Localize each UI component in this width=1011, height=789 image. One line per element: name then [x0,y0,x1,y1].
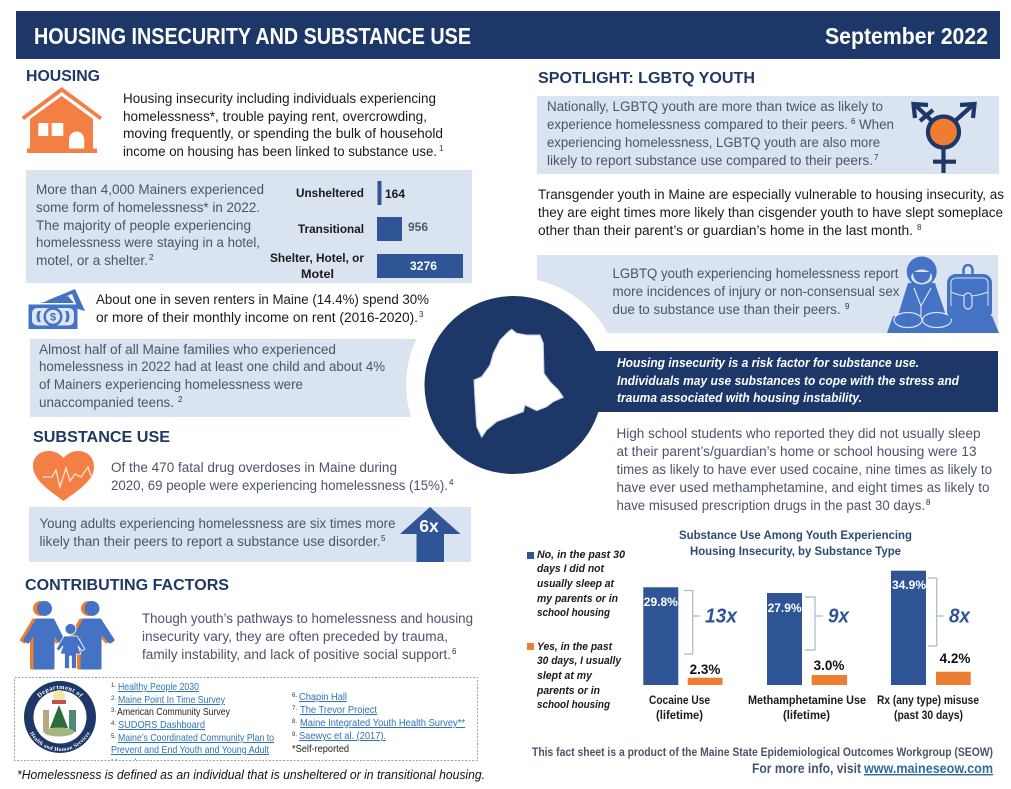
text: pathways: Though youth’s pathways to homelessness and housing [142,611,473,626]
text: six times: 5 [381,534,386,543]
text: high school students: have ever used methamphetamine, and eight times as likely to [616,480,990,495]
reference list: right column: 7. [292,706,297,712]
Rx bars: (past 30 days) [894,710,963,722]
reference list: left column: 2. [111,696,116,702]
text: pathways: 6 [452,647,457,656]
text: overdoses: Of the 470 fatal drug overdoses in Maine during [111,460,397,475]
bar chart: homelessness type: 956 [408,222,428,234]
text: six times: Young adults experiencing homelessness are six times more [40,516,396,531]
heading: contributing factors: CONTRIBUTING FACTORS [25,577,229,594]
text: overdoses: 2020, 69 people were experiencing homelessness (15%). [111,478,448,493]
reference list: right column: 6. [292,693,297,699]
reference list: left column: Homelessness [111,758,169,769]
methamphetamine bars [748,593,866,722]
legend: my parents or in [537,593,618,605]
bar chart: homelessness type: 3276 [410,261,437,273]
text: injury [612,266,900,317]
icon: map of Maine [474,329,563,437]
text: homelessness counts: motel, or a shelter. [36,253,148,268]
bar chart: homelessness type: Motel [301,269,334,281]
header banner [16,11,1000,59]
text: LGBTQ homelessness [547,99,894,168]
legend: school housing [537,699,610,711]
chart title: Housing Insecurity, by Substance Type [690,544,901,558]
text: homelessness counts: homelessness were staying in a hotel, [36,235,260,250]
text: high school students: High school students who reported they did not usually sleep [616,426,980,441]
bar chart: substance use [643,571,979,722]
legend: No, in the past 30 [537,549,626,561]
footer: www.maineseow.com [863,760,993,776]
icon: family [22,601,113,668]
text: injury: 9 [845,302,850,311]
icon: up arrow 6x [400,507,460,562]
legend: parents or in [536,685,600,697]
text: transgender youth: they are eight times more likely than cisgender youth to have slept someplace [538,205,1003,220]
heading: spotlight: SPOTLIGHT: LGBTQ YOUTH [538,70,755,87]
text: homelessness counts [36,182,264,268]
cocaine bars [643,587,738,722]
cocaine bars: 29.8% [644,595,678,609]
reference list: left column: 1. [111,683,116,689]
text: six times [40,516,396,549]
text: families: Almost half of all Maine families who experienced [39,342,336,357]
text: housing intro [123,91,444,159]
panel: injury and non-consensual sex [537,255,998,333]
text: families: 2 [178,395,183,404]
panel: LGBTQ homelessness [537,96,999,174]
date: September 2022 [825,23,988,49]
reference list: right column: *Self-reported [292,744,349,755]
cocaine bars: (lifetime) [656,710,703,722]
text: high school students [616,426,992,513]
legend: slept at my [537,670,593,682]
text: injury: due to substance use than their peers. [612,302,840,317]
icon: department seal: Department of [36,685,84,698]
bar chart: homelessness type: Transitional [298,224,364,236]
text: pathways: family instability, and lack of positive social support. [142,647,451,662]
text: LGBTQ homelessness: likely to report substance use compared to their peers. [547,153,873,168]
text: rent burden: 3 [419,310,424,319]
icon: transgender symbol [914,104,974,173]
reference list: left column: 3. [111,708,116,714]
text: homelessness counts: some form of homelessness* in 2022. [36,200,260,215]
reference list: left column: Maine’s Coordinated Community Plan to [118,733,274,744]
legend: usually sleep at [537,578,615,590]
reference list: left column: 4. [111,721,116,727]
text: housing intro: 1 [439,144,444,153]
callout text: Individuals may use substances to cope with the stress and [617,374,959,388]
legend: 30 days, I usually [537,655,622,667]
text: LGBTQ homelessness: When [859,117,894,132]
text: six times: likely than their peers to report a substance use disorder. [40,534,380,549]
footnote: *Homelessness is defined as an individual that is unsheltered or in transitional housing. [17,768,485,782]
Rx bars: Rx (any type) misuse [877,695,979,707]
text: injury: LGBTQ youth experiencing homelessness report [612,266,899,281]
bar chart: homelessness type [270,181,463,281]
text: rent burden: About one in seven renters in Maine (14.4%) spend 30% [96,292,429,307]
heading: housing: HOUSING [26,68,100,85]
methamphetamine bars: 27.9% [768,601,802,615]
text: families: unaccompanied teens. [39,395,174,410]
bar chart: homelessness type: Unsheltered [296,188,364,200]
icon: money: $ [50,312,56,324]
text: housing intro: homelessness*, trouble paying rent, overcrowding, [123,109,427,124]
text: homelessness counts: 2 [149,253,154,262]
footer: For more info, visit [752,761,861,776]
reference list: left column [111,682,274,760]
reference list: left column: Maine Point In Time Survey [118,695,226,706]
reference list: right column: 8. [292,719,297,725]
circle with map of Maine [424,296,602,474]
reference list: right column: Saewyc et al. (2017). [299,731,386,742]
icon: department seal: Health and Human Services [30,731,90,751]
reference list: right column: 9. [292,732,297,738]
heading: substance use: SUBSTANCE USE [33,429,170,446]
panel: homelessness counts [26,170,472,283]
footer [532,747,993,776]
text: housing intro: Housing insecurity including individuals experiencing [123,91,436,106]
callout text: trauma associated with housing instability. [617,391,862,405]
legend [527,549,626,711]
Rx bars [877,571,979,722]
reference list: left column: Prevent and End Youth and Young Adult [111,745,269,756]
text: transgender youth: Transgender youth in Maine are especially vulnerable to housing insecurity, as [538,187,1004,202]
bar chart: homelessness type: Shelter, Hotel, or [270,253,365,265]
text: transgender youth: other than their parent’s or guardian’s home in the last month. [538,223,913,238]
text: LGBTQ homelessness: experience homelessness compared to their peers. [547,117,848,132]
text: pathways [142,611,473,662]
text: high school students: 8 [926,498,931,507]
icon: up arrow 6x: 6x [419,516,439,536]
reference list: right column: The Trevor Project [300,705,377,716]
text: high school students: times as likely to have ever used cocaine, nine times as likely to [616,462,992,477]
Rx bars: 8x [949,606,971,628]
methamphetamine bars: Methamphetamine Use [748,695,866,707]
reference list: left column: SUDORS Dashboard [118,720,205,731]
reference list: right column: Maine Integrated Youth Health Survey** [300,718,465,729]
title: HOUSING INSECURITY AND SUBSTANCE USE [34,23,471,49]
icon: department seal [24,681,96,753]
reference list: left column: American Community Survey [117,707,231,718]
callout text [617,356,959,405]
text: families [39,342,385,410]
text: families: of Mainers experiencing homelessness were [39,377,303,392]
chart title [679,528,912,558]
text: injury: more incidences of injury or non-consensual sex [612,284,900,299]
text: LGBTQ homelessness: 7 [874,153,879,162]
text: housing intro: moving frequently, or spending the bulk of household [123,126,443,141]
text: overdoses [111,460,454,493]
text: transgender youth [538,187,1004,238]
text: LGBTQ homelessness: Nationally, LGBTQ youth are more than twice as likely to [547,99,883,114]
bar chart: homelessness type: 164 [385,189,406,201]
icon: heart [33,451,94,501]
legend: school housing [537,607,610,619]
legend: days I did not [537,563,605,575]
text: rent burden: or more of their monthly income on rent (2016-2020). [96,310,418,325]
legend: Yes, in the past [537,641,613,653]
reference list: left column: 5. [111,734,116,740]
Rx bars: 4.2% [940,651,970,666]
text: rent burden [96,292,429,325]
panel: substance use disorder [29,507,471,562]
callout band [590,351,998,412]
Rx bars: 34.9% [892,578,926,592]
reference list: left column: Healthy People 2030 [118,682,199,693]
panel: references [14,677,478,761]
methamphetamine bars: (lifetime) [783,710,830,722]
chart title: Substance Use Among Youth Experiencing [679,528,912,542]
cocaine bars: Cocaine Use [649,695,710,707]
text: housing intro: income on housing has been linked to substance use. [123,144,437,159]
text: high school students: at their parent’s/guardian’s home or school housing were 13 [616,444,976,459]
methamphetamine bars: 3.0% [814,658,844,673]
text: transgender youth: 8 [917,223,922,232]
callout text: Housing insecurity is a risk factor for substance use. [617,356,919,370]
methamphetamine bars: 9x [828,606,850,628]
text: families: homelessness in 2022 had at least one child and about 4% [39,359,385,374]
cocaine bars: 13x [705,606,738,628]
icon: money [28,289,85,329]
text: pathways: insecurity vary, they are often preceded by trauma, [142,629,448,644]
text: homelessness counts: More than 4,000 Mainers experienced [36,182,264,197]
icon: hooded youth and backpack [887,256,999,333]
text: homelessness counts: The majority of people experiencing [36,218,251,233]
panel: families [30,339,416,417]
text: LGBTQ homelessness: 6 [851,117,856,126]
reference list: right column [292,692,465,755]
icon: house [22,87,102,153]
text: overdoses: 4 [449,478,454,487]
text: LGBTQ homelessness: experiencing homelessness, LGBTQ youth are also more [547,135,880,150]
cocaine bars: 2.3% [690,662,720,677]
reference list: right column: Chapin Hall [299,692,347,703]
text: high school students: have misused prescription drugs in the past 30 days. [616,498,925,513]
